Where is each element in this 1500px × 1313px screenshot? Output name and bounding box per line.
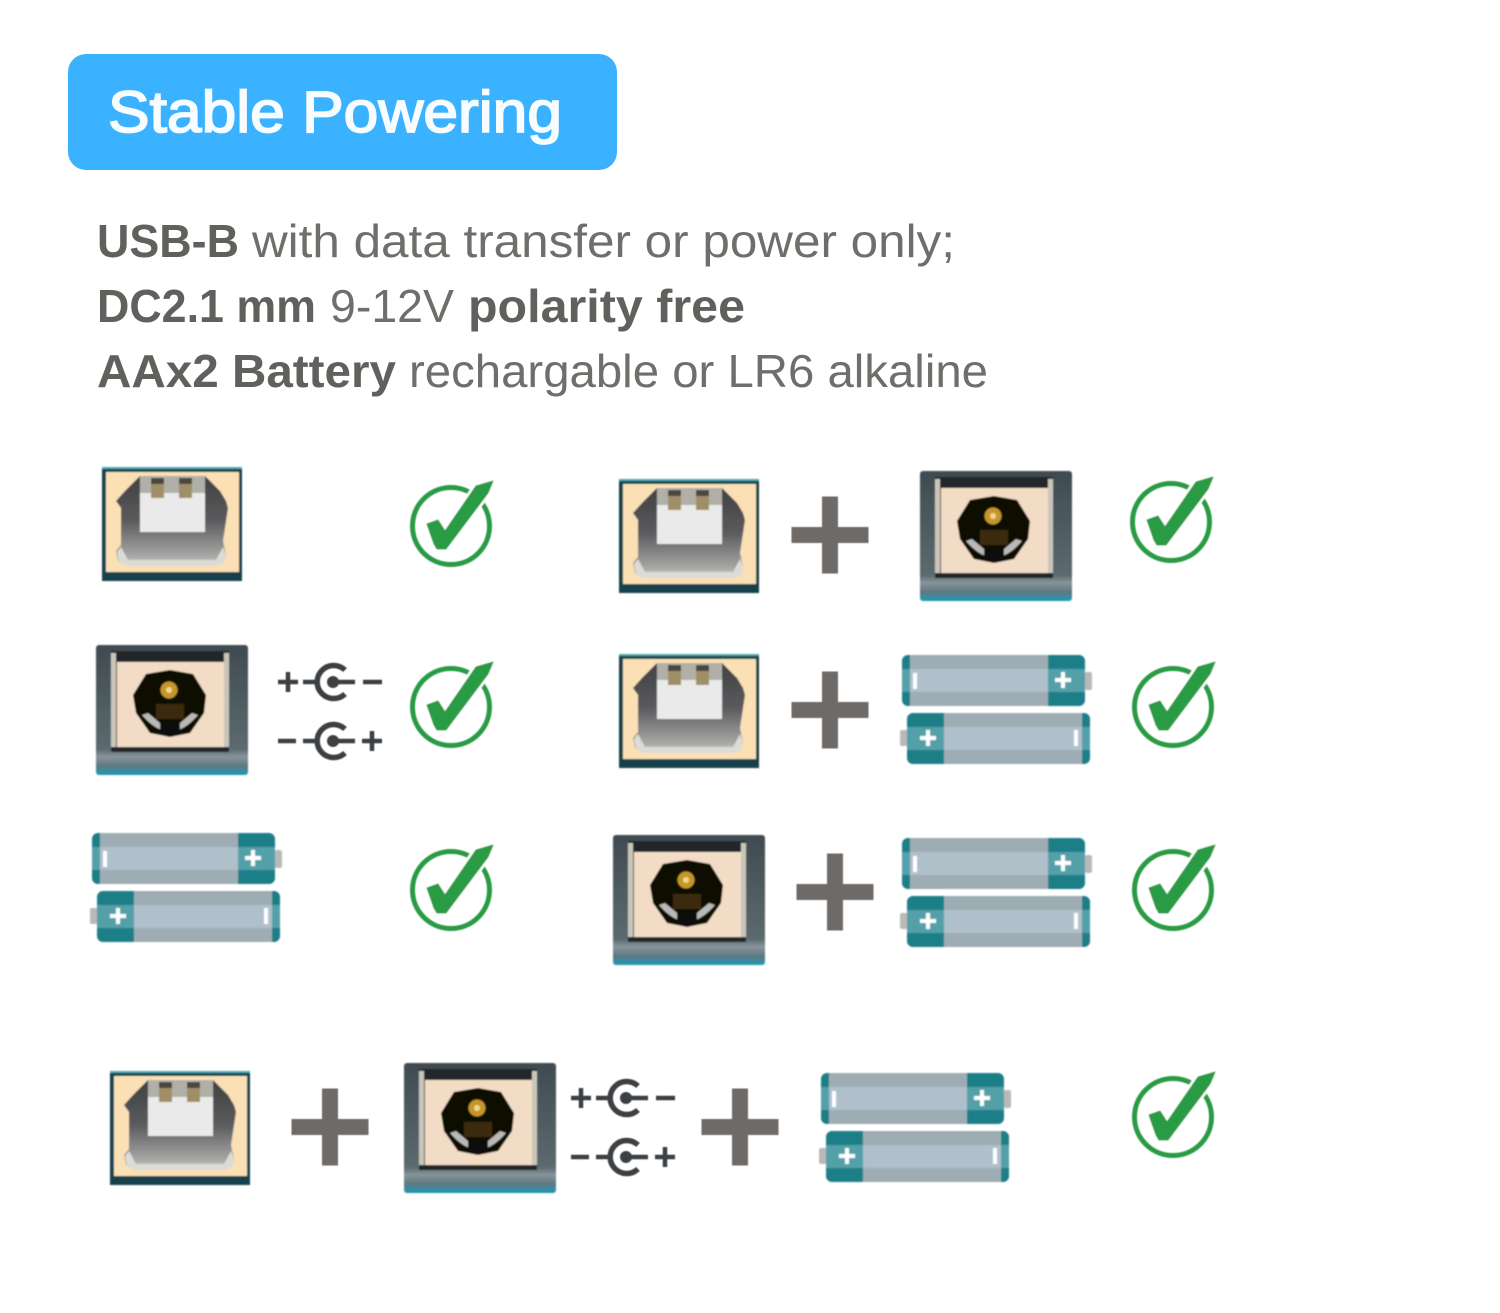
row: USB plus battery — [619, 654, 1215, 768]
row: USB plus DC — [619, 471, 1213, 601]
icon: AA batteries — [819, 1073, 1011, 1182]
icon: USB-B port — [619, 654, 759, 768]
text block: power options: rechargable or LR6 alkaline — [409, 345, 988, 397]
icon: check mark — [412, 481, 493, 564]
title: Stable Powering — [108, 80, 562, 145]
icon: check mark — [1134, 662, 1215, 746]
icon: DC jack — [920, 471, 1072, 601]
text block: power options: 9-12V — [330, 280, 454, 332]
icon: AA batteries — [900, 838, 1092, 947]
text block: power options: with data transfer or power only; — [251, 215, 955, 267]
icon: check mark — [1134, 1072, 1215, 1156]
icon: AA batteries — [90, 833, 282, 942]
text block: power options: USB-B — [97, 215, 239, 267]
text block: power options: DC2.1 mm — [97, 280, 316, 332]
row: USB plus DC plus battery — [110, 1063, 1215, 1193]
row: USB only — [102, 467, 493, 581]
icon: plus — [792, 496, 868, 574]
icon: DC jack — [96, 645, 248, 775]
row: DC only — [96, 645, 493, 775]
title — [68, 54, 617, 170]
icon: plus — [702, 1088, 778, 1166]
icon: USB-B port — [619, 479, 759, 593]
row: battery only — [90, 833, 493, 942]
text block: power options: AAx2 Battery — [97, 345, 396, 397]
icon: check mark — [1134, 845, 1215, 928]
text block: power options — [97, 215, 988, 397]
text block: power options: polarity free — [468, 280, 745, 332]
icon: DC jack — [404, 1063, 556, 1193]
icon: check mark — [412, 845, 493, 928]
icon: USB-B port — [110, 1071, 250, 1185]
icon: plus — [292, 1088, 368, 1166]
icon: plus — [796, 854, 874, 930]
icon: USB-B port — [102, 467, 242, 581]
icon: plus — [792, 672, 868, 748]
icon: polarity symbols — [571, 1082, 675, 1174]
icon: AA batteries — [900, 655, 1092, 764]
icon: polarity symbols — [278, 666, 382, 758]
icon: DC jack — [613, 835, 765, 965]
icon: check mark — [412, 662, 493, 746]
icon: check mark — [1132, 477, 1213, 560]
row: DC plus battery — [613, 835, 1215, 965]
